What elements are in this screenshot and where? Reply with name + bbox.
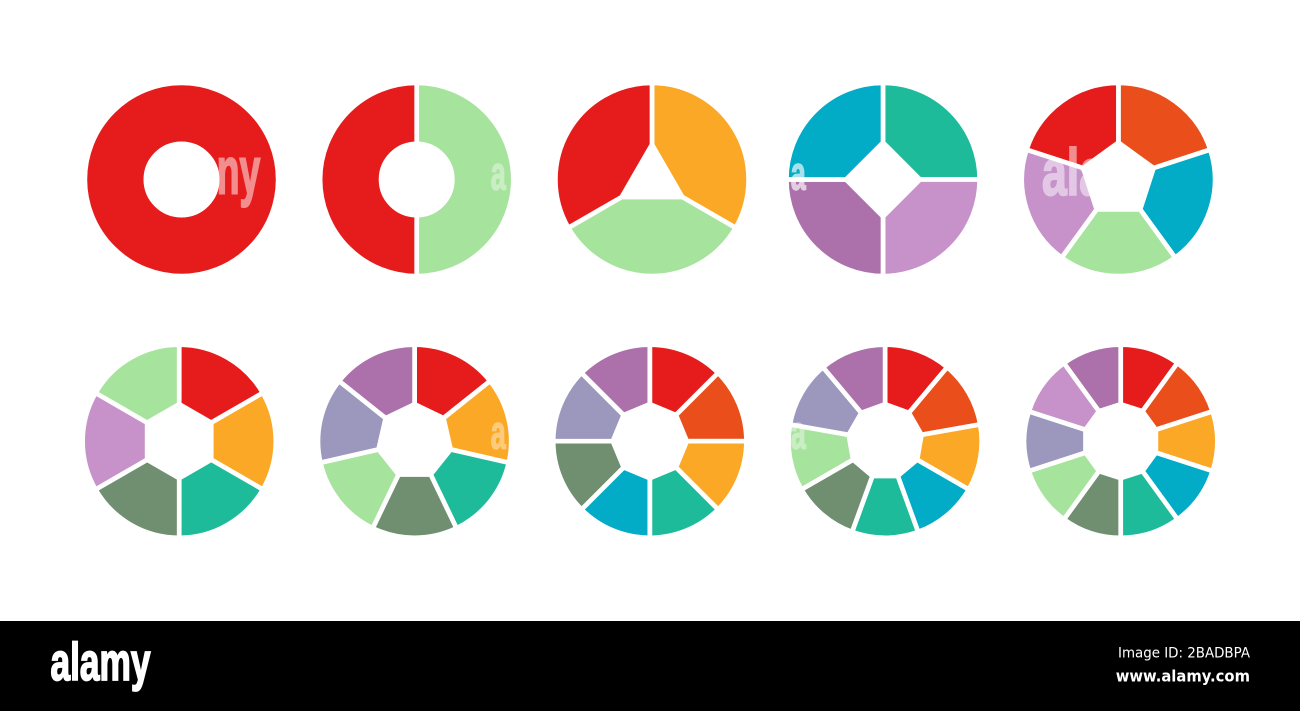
segment: purple	[786, 180, 883, 276]
segment: teal	[836, 468, 918, 553]
segment: orange	[1149, 411, 1230, 486]
segment: light purple	[883, 180, 980, 276]
segment: orange red	[1118, 83, 1210, 168]
chart: 8 segment donut	[533, 325, 766, 558]
segment: teal	[1092, 465, 1177, 553]
segment: light purple	[54, 378, 163, 490]
segment: orange	[433, 381, 537, 486]
segment: dark green	[533, 411, 631, 510]
segment: orange red	[903, 367, 995, 459]
segment: red left half	[320, 83, 417, 276]
segment: red	[650, 345, 718, 415]
watermark: a on chart 4: a	[791, 146, 806, 199]
segment: dark green	[357, 462, 457, 561]
segment: green	[1018, 432, 1103, 519]
footer text: image id: Image ID: 2BADBPA	[1118, 646, 1250, 662]
segment: red	[179, 345, 263, 423]
segment: orange	[195, 393, 305, 504]
segment: blue gray	[304, 373, 392, 463]
segment: green	[305, 429, 405, 528]
segment: green right half	[417, 83, 513, 276]
segment: teal	[883, 83, 980, 180]
watermark: a on chart 7: a	[491, 405, 506, 458]
segment: green	[770, 402, 861, 490]
segment: purple	[1064, 330, 1149, 417]
watermark fragments	[217, 133, 1105, 458]
chart: 2 segment donut	[320, 83, 513, 276]
chart: 5 segment donut	[987, 62, 1239, 312]
segment: cyan	[786, 83, 883, 180]
segment: light purple	[987, 135, 1112, 258]
segment: blue gray	[553, 373, 624, 441]
segment: dark green	[794, 447, 875, 532]
segment: red	[520, 72, 694, 228]
segment: orange	[913, 424, 991, 497]
segment: orange	[652, 83, 749, 228]
chart: 7 segment donut	[304, 322, 537, 561]
segment: purple	[823, 327, 914, 419]
footer bar	[0, 621, 1300, 711]
chart: 9 segment donut	[770, 327, 995, 553]
chart: 10 segment donut	[1011, 330, 1230, 553]
footer logo: alamy: alamy	[50, 633, 151, 692]
segment: orange red	[668, 373, 766, 471]
chart: 3 segment donut	[520, 72, 749, 311]
watermark: a on chart 2: a	[491, 146, 506, 199]
segment: cyan	[879, 455, 969, 543]
chart: 6 segment donut	[54, 320, 305, 562]
watermark: ny on chart 1: ny	[217, 133, 260, 207]
segment: green	[562, 155, 736, 311]
segment: blue gray	[1011, 396, 1092, 471]
segment: red	[1027, 62, 1136, 176]
footer text: website: www.alamy.com	[1116, 667, 1250, 686]
segment: purple	[581, 325, 680, 423]
watermark: a on chart 9: a	[791, 405, 806, 458]
watermark: ala on chart 5: ala	[1042, 135, 1105, 209]
segment: teal	[620, 460, 718, 558]
segment: dark green	[1064, 471, 1121, 538]
segment: purple	[339, 322, 444, 427]
segment: green	[96, 320, 205, 432]
segment: dark green	[96, 460, 179, 538]
segment: red	[885, 345, 947, 413]
segment: light purple	[1029, 357, 1110, 432]
segment: cyan	[1129, 150, 1239, 263]
segment: orange red	[1138, 363, 1223, 450]
segment: green	[1051, 189, 1175, 312]
segment: red	[1121, 345, 1177, 411]
segment: teal	[153, 450, 263, 562]
segment: cyan	[581, 467, 650, 538]
segment: blue gray	[790, 363, 868, 436]
segment: orange	[676, 441, 746, 510]
chart: 4 segment donut	[786, 83, 980, 276]
segment: cyan	[1132, 450, 1213, 525]
segment: teal	[420, 446, 509, 536]
segment: red	[415, 345, 490, 418]
chart: 1 segment donut	[115, 113, 248, 246]
